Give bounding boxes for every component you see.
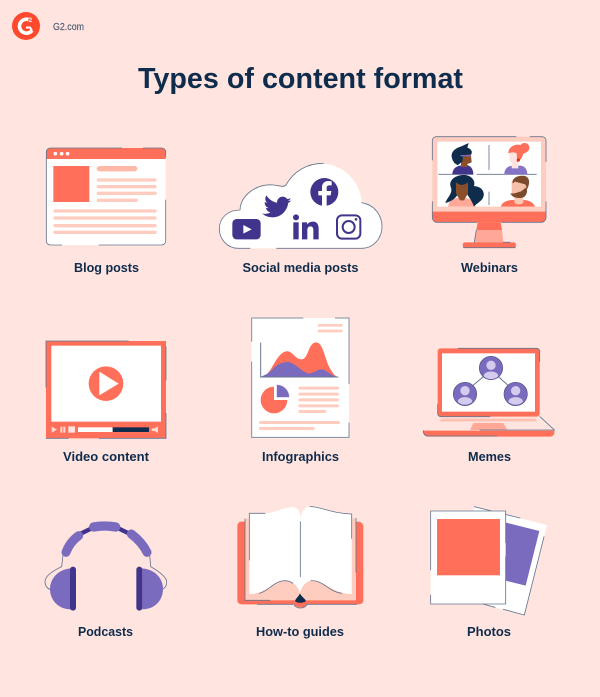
person: bottom-left — [445, 175, 484, 207]
facebook — [310, 178, 338, 206]
brand label: G2.com — [53, 21, 84, 33]
label: how-to guides: How-to guides — [256, 624, 344, 639]
icon: photos — [431, 507, 547, 615]
person: top-left — [452, 143, 473, 174]
title: Types of content format — [138, 63, 463, 95]
icon: podcast headphones — [45, 526, 167, 611]
icon: blog posts browser window — [46, 148, 166, 245]
person: top-right — [504, 143, 529, 174]
label: infographics: Infographics — [262, 449, 339, 464]
youtube — [232, 219, 261, 239]
logo: G2 — [12, 12, 40, 40]
label: memes: Memes — [468, 449, 511, 464]
icon: webinar monitor — [432, 137, 546, 248]
logo: G2: 2 — [28, 17, 32, 24]
icon: video player — [46, 341, 166, 438]
label: photos: Photos — [467, 624, 511, 639]
icon: infographic page — [252, 318, 349, 437]
icon: open book — [237, 506, 363, 608]
label: video content: Video content — [63, 449, 150, 464]
instagram — [337, 215, 360, 239]
label: webinars: Webinars — [461, 260, 518, 275]
label: blog posts: Blog posts — [74, 260, 139, 275]
label: podcasts: Podcasts — [78, 624, 133, 639]
twitter — [262, 194, 292, 220]
linkedin — [293, 214, 319, 239]
network nodes — [453, 356, 527, 406]
label: social media posts: Social media posts — [242, 260, 358, 275]
icon: social media cloud — [219, 163, 382, 248]
person: bottom-right — [501, 176, 535, 207]
icon: memes laptop — [423, 348, 554, 437]
